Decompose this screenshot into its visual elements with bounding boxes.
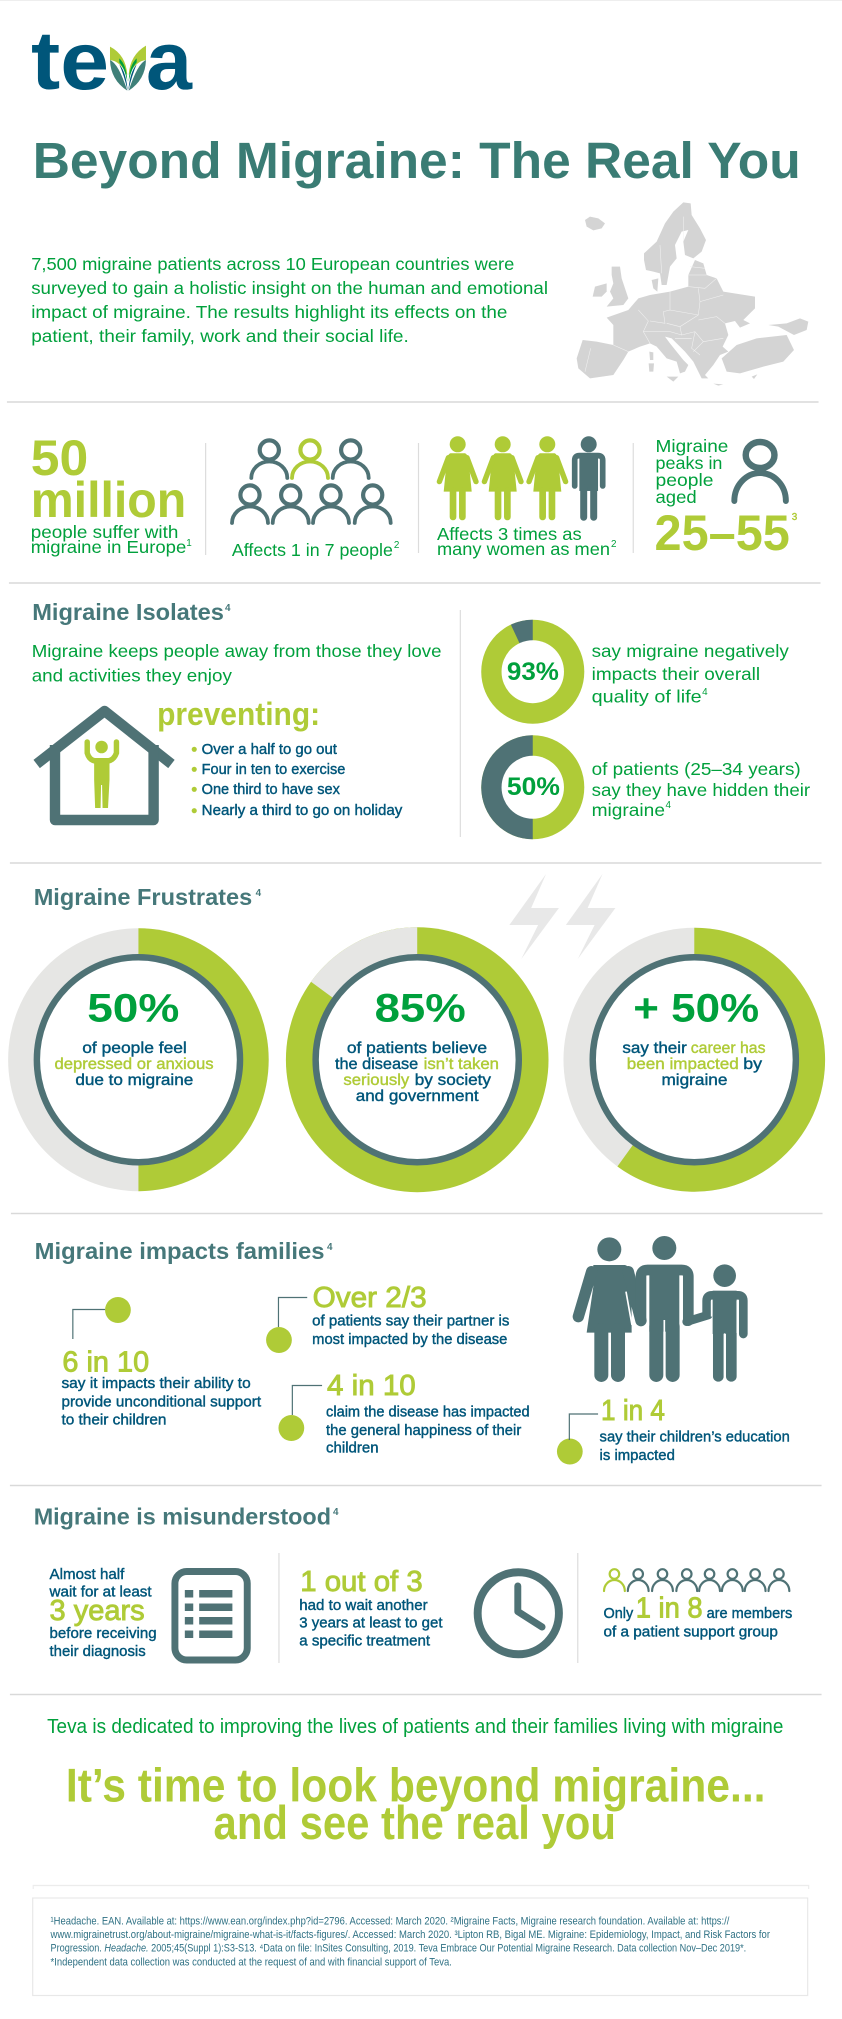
intro text	[31, 254, 548, 346]
list: preventing items	[192, 742, 403, 819]
stat: peak ages: people	[656, 470, 714, 490]
text: 1 in 8: are members	[707, 1606, 792, 1622]
heading: Migraine Frustrates	[34, 884, 252, 910]
intro text: 7,500 migraine patients across 10 European countries were	[31, 254, 514, 274]
text: 3 years	[48, 1567, 157, 1660]
title: Beyond Migraine: The Real You	[33, 132, 801, 189]
text: hidden migraine: 4	[665, 800, 671, 811]
chart: 85% ring: isn’t taken	[424, 1056, 499, 1073]
stat: affects 1 in 7: Affects 1 in 7 people	[232, 540, 393, 560]
footnote strip	[33, 1886, 809, 1889]
callout: 4 in 10: the general happiness of their	[326, 1423, 521, 1439]
chart: 93% donut: 93%	[507, 658, 559, 686]
chart: 50% ring: due to migraine	[75, 1072, 193, 1089]
stat: affects 1 in 7: 2	[394, 540, 400, 551]
list: preventing items: Four in ten to exercise	[202, 762, 345, 778]
separator	[7, 401, 819, 403]
logo: teva	[31, 14, 193, 107]
chart: 50% ring	[8, 928, 269, 1191]
list: preventing items: Nearly a third to go on holiday	[202, 803, 403, 819]
separator	[11, 1212, 823, 1214]
chart: 85% ring: 85%	[375, 986, 466, 1031]
stat: peak ages	[655, 436, 798, 561]
subheading	[32, 641, 442, 686]
stat: peak ages: 3	[792, 512, 798, 523]
heading: 4	[225, 603, 231, 614]
text: 1 out of 3: 1 out of 3	[300, 1566, 423, 1598]
text: 1 out of 3: a specific treatment	[299, 1633, 430, 1650]
icon: eight people	[604, 1569, 789, 1591]
callout: over 2/3: most impacted by the disease	[312, 1332, 507, 1348]
stat: 50 million: people suffer with	[31, 522, 178, 542]
callout: 4 in 10	[278, 1370, 530, 1457]
text: quality of life: quality of life	[592, 686, 702, 707]
separator	[10, 862, 822, 864]
heading: 4	[333, 1507, 339, 1518]
subheading: and activities they enjoy	[32, 665, 232, 686]
panel: migraine isolates	[32, 599, 810, 839]
panel: migraine impacts families	[35, 1236, 790, 1464]
text: 1 out of 3	[299, 1566, 442, 1650]
stat: women vs men: many women as men	[437, 539, 610, 559]
chart: 93% donut	[481, 620, 584, 724]
chart: +50% ring: say their	[622, 1040, 688, 1057]
text: quality of life: impacts their overall	[592, 664, 760, 684]
icon: seven people	[232, 440, 391, 523]
list: preventing items: Over a half to go out	[202, 742, 337, 758]
stat: 50 million: 50	[31, 430, 88, 486]
callout: 6 in 10	[61, 1297, 261, 1429]
heading: preventing: preventing:	[157, 696, 320, 732]
stat: 50 million: million	[31, 472, 186, 528]
text: quality of life: say migraine negatively	[592, 641, 789, 661]
panel: key statistics	[31, 430, 798, 561]
footnotes box: *Independent data collection was conducted at the request of and with financial support of Teva.	[51, 1956, 452, 1969]
callout: 4 in 10: children	[326, 1440, 379, 1457]
text: 3 years: Almost half	[50, 1567, 125, 1583]
intro text: impact of migraine. The results highlight its effects on the	[31, 302, 507, 322]
separator	[10, 1694, 822, 1696]
icon: person	[734, 442, 786, 501]
chart: +50% ring: by	[743, 1056, 762, 1073]
stat: 50 million	[31, 430, 192, 557]
callout: 1 in 4: 1 in 4	[601, 1395, 665, 1427]
text: 1 in 8: Only	[604, 1606, 634, 1622]
panel: migraine frustrates	[8, 874, 825, 1192]
intro text: patient, their family, work and their social life.	[31, 326, 409, 346]
text: 3 years: 3 years	[50, 1595, 145, 1627]
chart: 50% donut	[481, 735, 584, 839]
text: 1 in 8	[604, 1592, 792, 1641]
stat: peak ages: 25–55	[655, 505, 790, 561]
text: hidden migraine: of patients (25–34 years)	[592, 759, 801, 779]
logo: teva: a	[146, 14, 193, 107]
stat: women vs men: 2	[611, 539, 617, 550]
stat: 50 million: migraine in Europe	[31, 537, 186, 557]
chart: 85% ring: the disease	[335, 1056, 418, 1073]
text: hidden migraine	[592, 759, 810, 820]
callout: 1 in 4: is impacted	[600, 1448, 675, 1464]
callout: over 2/3: of patients say their partner is	[312, 1313, 509, 1330]
text: hidden migraine: say they have hidden their	[592, 780, 810, 800]
separator	[10, 1484, 822, 1486]
icon: document list	[175, 1572, 247, 1660]
intro text: surveyed to gain a holistic insight on the human and emotional	[31, 278, 548, 298]
callout: over 2/3: Over 2/3	[313, 1282, 427, 1314]
stat: women vs men: Affects 3 times as	[437, 524, 582, 544]
icon: teva leaf	[110, 46, 146, 91]
heading: 4	[327, 1242, 333, 1253]
stat: women vs men	[437, 436, 617, 559]
chart: 50% ring: 50%	[87, 986, 179, 1031]
chart: 50% ring: of people feel	[82, 1040, 187, 1057]
callout: 4 in 10: claim the disease has impacted	[326, 1404, 530, 1421]
panel: migraine is misunderstood	[34, 1503, 792, 1663]
text: 1 in 8: of a patient support group	[604, 1624, 778, 1641]
footnotes box	[33, 1898, 808, 1996]
icon: lightning bolts	[509, 874, 615, 959]
text: Teva dedication: Teva is dedicated to improving the lives of patients and their families living with migraine	[47, 1716, 783, 1738]
text: 1 in 8: 1 in 8	[636, 1592, 703, 1625]
stat: 50 million: 1	[186, 538, 192, 549]
stat: peak ages: peaks in	[656, 453, 722, 473]
chart: 85% ring: by society	[415, 1072, 491, 1089]
callout: 1 in 4	[557, 1395, 790, 1464]
text: 3 years: before receiving	[50, 1626, 157, 1642]
heading: Migraine impacts families	[35, 1238, 325, 1264]
text: quality of life	[592, 641, 789, 707]
text: hidden migraine: migraine	[592, 800, 665, 820]
callout: 1 in 4: say their children’s education	[600, 1429, 790, 1446]
chart: 85% ring	[286, 927, 549, 1192]
text: 1 out of 3: 3 years at least to get	[299, 1615, 442, 1632]
stat: peak ages: Migraine	[656, 436, 728, 456]
text: quality of life: 4	[702, 687, 708, 698]
closing headline: and see the real you	[214, 1797, 616, 1849]
chart: +50% ring	[563, 928, 825, 1192]
heading: Migraine Isolates	[32, 599, 224, 625]
heading: Migraine is misunderstood	[34, 1503, 331, 1530]
top edge line	[0, 0, 842, 2]
chart: 85% ring: and government	[356, 1088, 479, 1105]
callout: 4 in 10: 4 in 10	[327, 1370, 416, 1402]
callout: over 2/3	[266, 1282, 509, 1353]
chart: +50% ring: career has	[691, 1040, 766, 1057]
chart: 85% ring: of patients believe	[347, 1040, 487, 1057]
chart: +50% ring: been impacted	[627, 1056, 739, 1073]
callout: 6 in 10: say it impacts their ability to	[61, 1376, 251, 1392]
text: 1 out of 3: had to wait another	[299, 1598, 428, 1614]
chart: +50% ring: migraine	[661, 1072, 728, 1089]
heading: 4	[256, 888, 262, 899]
chart: +50% ring: + 50%	[633, 986, 759, 1031]
icon: three women and a man	[439, 436, 603, 517]
text: 3 years: their diagnosis	[50, 1644, 146, 1660]
logo: teva: te	[31, 14, 109, 107]
list: preventing items: One third to have sex	[202, 782, 341, 798]
subheading: Migraine keeps people away from those they love	[32, 641, 442, 661]
chart: 50% ring: depressed or anxious	[55, 1056, 214, 1073]
stat: peak ages: aged	[656, 487, 697, 507]
icon: family	[578, 1236, 743, 1377]
chart: 50% donut: 50%	[507, 773, 560, 801]
callout: 6 in 10: to their children	[61, 1412, 166, 1429]
separator	[9, 582, 821, 584]
callout: 6 in 10: 6 in 10	[62, 1346, 149, 1379]
closing headline: It’s time to look beyond migraine...	[66, 1759, 766, 1812]
icon: house with person	[37, 711, 171, 820]
closing headline	[66, 1759, 766, 1849]
stat: affects 1 in 7	[232, 440, 400, 560]
icon: clock	[478, 1572, 559, 1654]
callout: 6 in 10: provide unconditional support	[61, 1394, 261, 1411]
chart: 85% ring: seriously	[343, 1072, 409, 1089]
text: 3 years: wait for at least	[48, 1584, 152, 1601]
map of Europe	[577, 202, 808, 386]
